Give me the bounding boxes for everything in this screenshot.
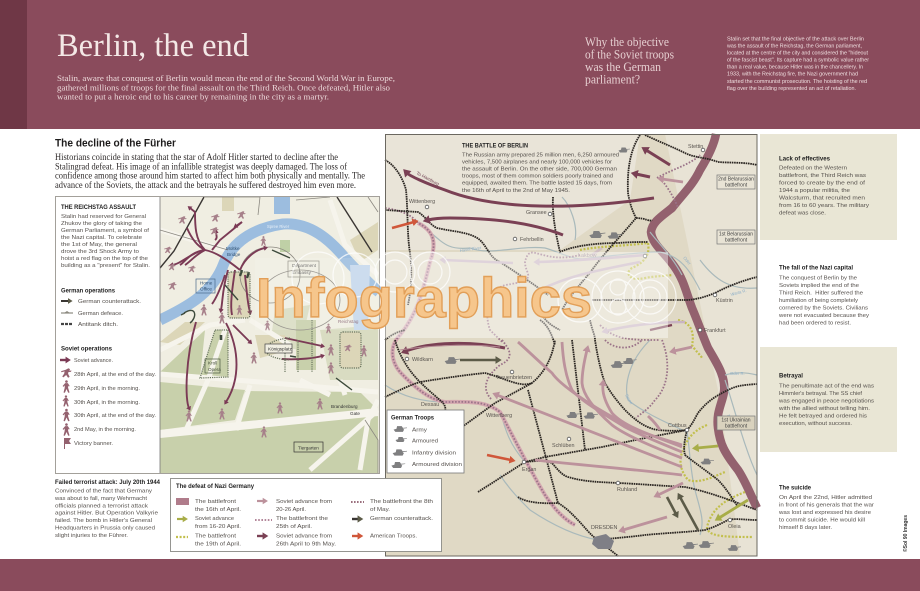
text block: failed terrorist attack: failed. The bomb in Hitler's General bbox=[55, 518, 152, 524]
battle text: the assault of Berlin. On the other side, 700,000 German bbox=[462, 166, 617, 172]
text block: fall of the Nazi capital: Third Reich. Hitler suffered the bbox=[779, 290, 863, 296]
panel: lack of effectives: defeat was close. bbox=[779, 210, 826, 216]
map labels: Bridge bbox=[227, 252, 241, 257]
thin waterways bbox=[385, 197, 757, 540]
Reichstag explanation: of the fascist beast". Its capture had a symbolic value rather bbox=[727, 58, 869, 64]
legend labels: Soviet advance from bbox=[276, 534, 332, 540]
text block: fall of the Nazi capital: The fall of the Nazi capital bbox=[779, 266, 853, 272]
legend body text: hoist a red flag on the top of the bbox=[61, 256, 148, 262]
legend labels: 26th April to 9th May. bbox=[276, 542, 336, 548]
text block: fall of the Nazi capital: were not evacuated because they bbox=[778, 313, 869, 319]
italic water labels: Neisse bbox=[726, 414, 734, 428]
town labels: Stettin bbox=[688, 144, 703, 150]
legend body text bbox=[61, 214, 150, 269]
town labels: Treuenbrietzen bbox=[496, 375, 532, 381]
section intro: confidence among those around him started to affect him both physically and mentally. The bbox=[55, 171, 365, 181]
legend labels: the 16th of April. bbox=[195, 507, 241, 513]
map labels: Brandenburg bbox=[331, 404, 358, 409]
frontline dotted: 25th of April bbox=[486, 155, 700, 418]
legend labels: The battlefront the 8th bbox=[370, 499, 433, 505]
text block: failed terrorist attack: slight injuries to the Führer. bbox=[55, 533, 128, 539]
legend body text: Zhukov the glory of taking the bbox=[61, 221, 142, 227]
battlefront labels: 1st Belarussian bbox=[719, 232, 753, 238]
text block: the suicide: in front of his generals that the war bbox=[779, 502, 874, 508]
panel: betrayal: The penultimate act of the end was bbox=[779, 384, 874, 390]
legend labels: The battlefront bbox=[195, 534, 236, 540]
legend: the defeat of Nazi Germany bbox=[170, 478, 442, 552]
text block: fall of the Nazi capital: had been ordered to resist. bbox=[779, 320, 851, 326]
italic water labels: Warta R. bbox=[730, 288, 747, 297]
text block: failed terrorist attack: officials planned a terrorist attack bbox=[55, 503, 148, 509]
legend body text: Stalin had reserved for General bbox=[61, 214, 146, 220]
legend labels: from 16-20 April. bbox=[195, 524, 241, 530]
question heading: parliament? bbox=[585, 72, 640, 86]
legend labels: Soviet advance bbox=[195, 516, 234, 522]
battle text: vehicles, 7,500 airplanes and nearly 100,000 vehicles for bbox=[462, 159, 612, 165]
frontline dotted: 8th of May bbox=[392, 223, 575, 525]
map labels: Reichstag bbox=[338, 319, 359, 324]
German operations key: German counterattack. bbox=[78, 299, 141, 305]
yellow arrows bbox=[697, 446, 748, 518]
Reichstag explanation: flag over the building represented an act of retaliation. bbox=[727, 86, 856, 92]
battlefront labels: battlefront bbox=[725, 238, 748, 244]
battle heading: THE BATTLE OF BERLIN bbox=[462, 144, 528, 150]
town labels: Ruhland bbox=[617, 487, 637, 493]
town markers bbox=[405, 148, 732, 522]
map labels: Tiergarten bbox=[298, 446, 319, 450]
italic water labels bbox=[459, 245, 747, 428]
troops bbox=[445, 148, 741, 551]
title: Berlin, the end bbox=[57, 28, 249, 64]
legend labels: of May. bbox=[370, 507, 390, 513]
legend labels bbox=[195, 499, 433, 548]
battle text: equipped, awaited them. The battle lasted 15 days, from bbox=[462, 181, 612, 187]
question heading bbox=[585, 35, 674, 86]
battlefront labels: battlefront bbox=[725, 182, 748, 188]
map labels: Königsplatz bbox=[268, 346, 292, 352]
map labels: Office bbox=[200, 286, 212, 292]
battlefront labels bbox=[717, 175, 755, 430]
panel: betrayal: Betrayal bbox=[779, 374, 803, 380]
German defence marks bbox=[181, 250, 352, 390]
parks bbox=[160, 305, 378, 473]
Reichstag explanation: was the assault of the Reichstag, the German parliament, bbox=[726, 44, 862, 50]
legend heading: The defeat of Nazi Germany bbox=[176, 484, 255, 490]
section intro: Stalingrad defeat. His image of an infallible strategist was deeply damaged. The loss of bbox=[55, 161, 347, 171]
Dresden bbox=[592, 534, 614, 549]
legend: German troops: Infantry division bbox=[412, 450, 456, 456]
Soviet advance, 26 April to 9 May arrows bbox=[400, 150, 672, 351]
text block: the suicide: The suicide bbox=[779, 486, 812, 492]
text block: fall of the Nazi capital: cornered by the Soviets. Civilians bbox=[779, 306, 868, 312]
Soviet operations key: Soviet operations bbox=[61, 346, 113, 352]
town labels bbox=[409, 144, 741, 531]
battle text bbox=[462, 152, 619, 194]
Soviet operations key bbox=[60, 346, 156, 449]
panel: lack of effectives: Lack of effectives bbox=[779, 156, 831, 162]
Oder river bbox=[651, 134, 757, 508]
legend labels: 25th of April. bbox=[276, 524, 312, 530]
map labels: Kroll bbox=[208, 360, 217, 366]
question heading: of the Soviet troops bbox=[585, 48, 674, 62]
road network bbox=[160, 200, 378, 470]
header band bbox=[0, 0, 920, 129]
intro text: wanted to put a heroic end to his career by remaining in the city as a martyr. bbox=[57, 92, 329, 102]
legend: German troops bbox=[387, 410, 464, 473]
text block: failed terrorist attack: Failed terrorist attack: July 20th 1944 bbox=[55, 480, 161, 486]
panel: lack of effectives: battlefront, the Third Reich was bbox=[779, 173, 866, 179]
Reichstag explanation: Stalin set that the final objective of the attack over Berlin bbox=[727, 36, 864, 42]
German operations key: Antitank ditch. bbox=[78, 322, 118, 328]
Reichstag explanation bbox=[726, 36, 869, 92]
battle text: troops, most of them common soldiers poorly trained and bbox=[462, 174, 613, 180]
map labels: Moltke bbox=[226, 246, 240, 251]
map labels: Gate bbox=[350, 411, 360, 416]
legend labels: 20-26 April. bbox=[276, 507, 306, 513]
Soviet advance arrows bbox=[172, 208, 322, 408]
text block: fall of the Nazi capital: humiliation of being completely bbox=[779, 298, 858, 304]
Soviet operations key: Victory banner. bbox=[74, 441, 113, 447]
town labels: Oleia bbox=[728, 524, 741, 530]
Soviet operations key: 2nd May, in the morning. bbox=[74, 427, 136, 433]
Soviet advance, 16-20 April arrows bbox=[497, 179, 692, 530]
town labels: Wittenberg bbox=[486, 413, 512, 419]
legend: German troops: Armoured bbox=[412, 438, 438, 444]
text block: failed terrorist attack bbox=[54, 480, 161, 539]
header left strip bbox=[0, 0, 27, 129]
town labels: Wittenberg bbox=[409, 199, 435, 205]
panel: lack of effectives: from 16 to 60 years. The military bbox=[779, 203, 869, 209]
American arrows bbox=[392, 222, 511, 460]
text block: failed terrorist attack: Convinced of the fact that Germany bbox=[55, 488, 152, 494]
panel: Reichstag legend bbox=[56, 196, 380, 474]
legend heading: THE REICHSTAG ASSAULT bbox=[61, 205, 136, 211]
legend body text: German Parliament, a symbol of bbox=[61, 228, 149, 234]
map labels: Embassy bbox=[292, 270, 312, 275]
map labels: Home bbox=[200, 280, 213, 286]
river Spree bbox=[160, 224, 379, 320]
legend labels: The battlefront bbox=[195, 499, 236, 505]
battle text: the 16th of April to the 2nd of May 1945. bbox=[462, 188, 570, 194]
text block: failed terrorist attack: against Hitler. But Operation Valkyrie bbox=[55, 511, 158, 517]
text block: the suicide: was lost and expressed his desire bbox=[778, 510, 871, 516]
panel: betrayal: Himmler's betrayal. The SS chief bbox=[779, 391, 862, 397]
town labels: Lakbow bbox=[578, 253, 597, 259]
Reichstag explanation: located at the centre of the city and considered the "hideout bbox=[727, 51, 868, 57]
section intro: advance of the Soviets, the attack and the betrayals he suffered destroyed him even more. bbox=[55, 180, 356, 190]
panel: betrayal: with the allied without telling him. bbox=[778, 406, 870, 412]
legend: German troops: Armoured division bbox=[412, 462, 462, 468]
Soviet operations key: Soviet advance. bbox=[74, 358, 113, 364]
legend: German troops: German Troops bbox=[391, 416, 435, 422]
legend body text: the 1st of May, the general bbox=[61, 242, 137, 248]
Soviet operations key: 28th April, at the end of the day. bbox=[74, 372, 156, 378]
map: Reichstag assault: Spree River bbox=[267, 224, 290, 229]
town labels: Ergan bbox=[522, 467, 536, 473]
town labels: Fehrbellin bbox=[520, 237, 544, 243]
To Hamburg label: To Hamburg bbox=[416, 170, 440, 187]
battlefront labels: battlefront bbox=[725, 424, 748, 430]
italic water labels: Spree bbox=[624, 393, 634, 406]
legend body text: the Nazi capital. To celebrate bbox=[61, 235, 142, 241]
legend labels: the 19th of April. bbox=[195, 542, 241, 548]
town labels: Wildkarn bbox=[412, 357, 433, 363]
Soviet advance, 20-26 April arrows bbox=[444, 248, 685, 331]
legend labels: American Troops. bbox=[370, 534, 417, 540]
legend labels: The battlefront the bbox=[276, 516, 328, 522]
Reichstag explanation: 1933, with the Reichstag fire, the Nazi government had bbox=[727, 72, 858, 78]
German operations key: German defeace. bbox=[78, 311, 123, 317]
intro text: gathered millions of troops for the final assault on the Third Reich. Once defeated, Hitler also bbox=[57, 82, 391, 92]
legend swatches and arrows bbox=[176, 498, 364, 537]
town labels: Frankfurt bbox=[704, 328, 726, 334]
tan blocks bbox=[160, 197, 378, 370]
town labels: Dessau bbox=[421, 402, 439, 408]
legend body text: building as a "present" for Stalin. bbox=[61, 263, 150, 269]
map: Reichstag assault bbox=[160, 197, 379, 473]
panel: betrayal: He felt betrayed and ordered his bbox=[779, 414, 867, 420]
Soviet operations key: 30th April, in the morning. bbox=[74, 400, 140, 406]
text block: the suicide bbox=[778, 486, 874, 531]
text block: failed terrorist attack: was about to fall, many Wehrmacht bbox=[54, 496, 147, 502]
town labels: Cottbus bbox=[668, 423, 687, 429]
italic water labels: Oder bbox=[682, 255, 692, 266]
legend labels: German counterattack. bbox=[370, 516, 433, 522]
railways bbox=[385, 135, 757, 556]
panel: lack of effectives: Defeated on the Western bbox=[779, 166, 847, 172]
intro text bbox=[57, 73, 395, 102]
panel: betrayal: was engaged in peace negotiations bbox=[778, 398, 874, 404]
map labels bbox=[196, 246, 360, 452]
battlefront labels: 1st Ukrainian bbox=[721, 418, 751, 424]
text block: the suicide: himself 8 days later. bbox=[779, 525, 832, 531]
watermark wordmark: Infographics bbox=[256, 266, 592, 329]
German operations key: German operations bbox=[61, 288, 116, 294]
watermark bbox=[255, 252, 676, 338]
town labels: Küstrin bbox=[716, 298, 733, 304]
town labels: Schlüben bbox=[552, 443, 574, 449]
text block: fall of the Nazi capital: Soviets implied the end of the bbox=[779, 283, 859, 289]
battle text: The Russian army prepared 25 million men, 6,250 armoured bbox=[462, 152, 619, 158]
section intro: Historians coincide in stating that the star of Adolf Hitler started to decline after the bbox=[55, 152, 338, 162]
battlefront labels: 2nd Belarussian bbox=[718, 176, 754, 182]
watermark rings bbox=[292, 252, 676, 323]
text block: failed terrorist attack: Headquarters in Prussia only caused bbox=[55, 526, 155, 532]
map labels: Opera bbox=[208, 367, 221, 372]
text block: fall of the Nazi capital bbox=[778, 266, 869, 326]
italic water labels: Havel River bbox=[459, 245, 482, 253]
German operations key bbox=[61, 288, 141, 328]
railway line bbox=[160, 197, 372, 268]
town labels: DRESDEN bbox=[591, 525, 617, 531]
map labels: Department bbox=[292, 263, 317, 268]
frontline dotted: 19th of April bbox=[580, 243, 752, 537]
image credit: ©Sol 90 Images bbox=[902, 515, 909, 552]
question heading: was the German bbox=[585, 60, 661, 74]
German counterattack arrows bbox=[460, 360, 698, 530]
Soviet operations key: 30th April, at the end of the day. bbox=[74, 413, 156, 419]
text block: the suicide: to commit suicide. He would kill bbox=[779, 518, 865, 524]
text block: fall of the Nazi capital: The conquest of Berlin by the bbox=[779, 276, 857, 282]
footer band bbox=[0, 559, 920, 591]
panel: lack of effectives: 1944 a popular militia, the bbox=[779, 188, 850, 194]
panel: lack of effectives bbox=[760, 134, 897, 240]
map: battle of Berlin bbox=[385, 134, 757, 556]
town labels: Gransee bbox=[526, 210, 547, 216]
Soviet operations key: 29th April, in the morning. bbox=[74, 386, 140, 392]
panel: lack of effectives: forced to create by the end of bbox=[779, 180, 865, 186]
panel: lack of effectives: Walcsturm, that recruited men bbox=[779, 196, 865, 202]
panel: betrayal: execution, without success. bbox=[779, 421, 852, 427]
text block: the suicide: On April the 22nd, Hitler admitted bbox=[779, 495, 872, 501]
soldiers bbox=[164, 211, 367, 438]
Reichstag explanation: than a real value, because Hitler was in the chancellery. In bbox=[727, 65, 863, 71]
question heading: Why the objective bbox=[585, 35, 669, 49]
legend body text: drove the 3rd Shock Army to bbox=[61, 249, 139, 255]
defensive perimeters bbox=[200, 272, 361, 378]
panel: betrayal bbox=[760, 347, 897, 452]
legend: German troops: Army bbox=[412, 428, 427, 434]
legend labels: Soviet advance from bbox=[276, 499, 332, 505]
intro text: Stalin, aware that conquest of Berlin would mean the end of the Second World War in Europe, bbox=[57, 73, 395, 83]
section intro bbox=[55, 152, 365, 190]
section heading: The decline of the Fürher bbox=[55, 138, 177, 150]
italic water labels: Oder R. bbox=[730, 371, 745, 376]
Reichstag explanation: started the communist prosecution. The hoisting of the red bbox=[727, 79, 867, 85]
